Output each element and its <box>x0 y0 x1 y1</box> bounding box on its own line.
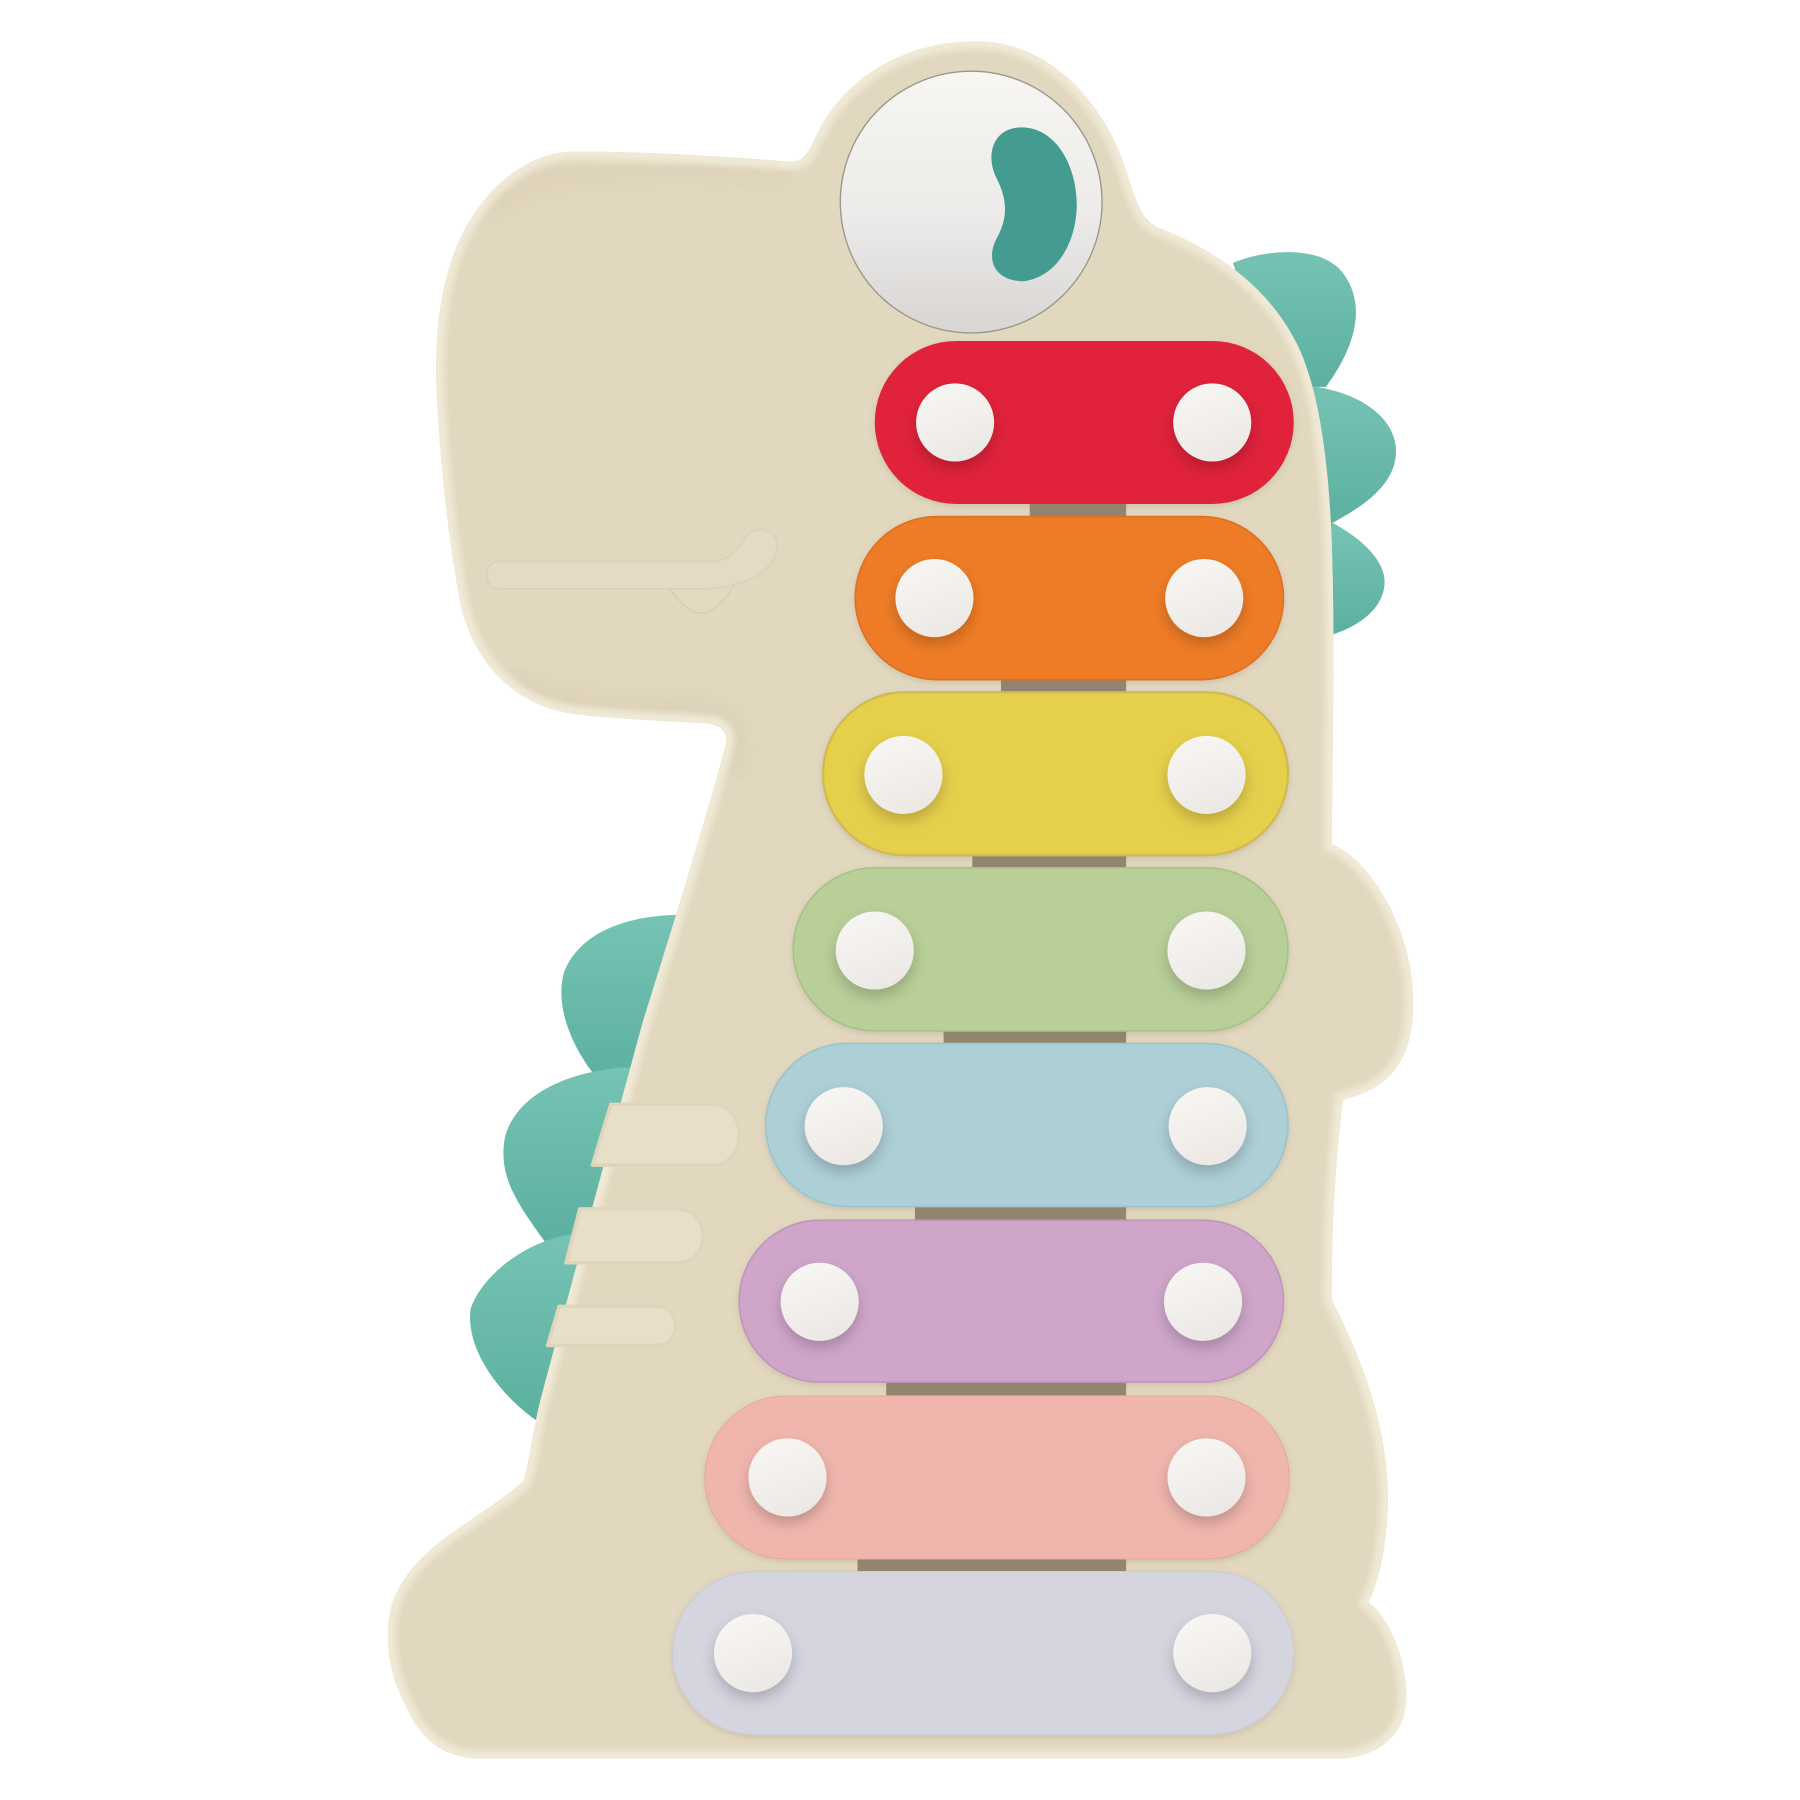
dinosaur body <box>388 41 1413 1759</box>
bar: blue <box>766 1043 1288 1207</box>
bar: purple <box>739 1220 1283 1382</box>
pupil <box>991 127 1077 281</box>
eye <box>840 71 1102 333</box>
teal back spikes: left side <box>470 915 712 1421</box>
bar: yellow <box>823 692 1288 855</box>
bar: lavender grey <box>673 1572 1294 1735</box>
leg and tail ridges <box>548 1104 739 1345</box>
mouth line with tooth <box>486 529 777 613</box>
bar: orange <box>855 517 1283 680</box>
bar: green <box>793 868 1288 1031</box>
illustration: dinosaur xylophone toy <box>388 41 1414 1759</box>
bar: red <box>875 341 1294 504</box>
teal back spikes: right side <box>1233 252 1396 635</box>
rail gaps between bars <box>858 504 1126 1572</box>
bar: pink <box>705 1396 1289 1559</box>
